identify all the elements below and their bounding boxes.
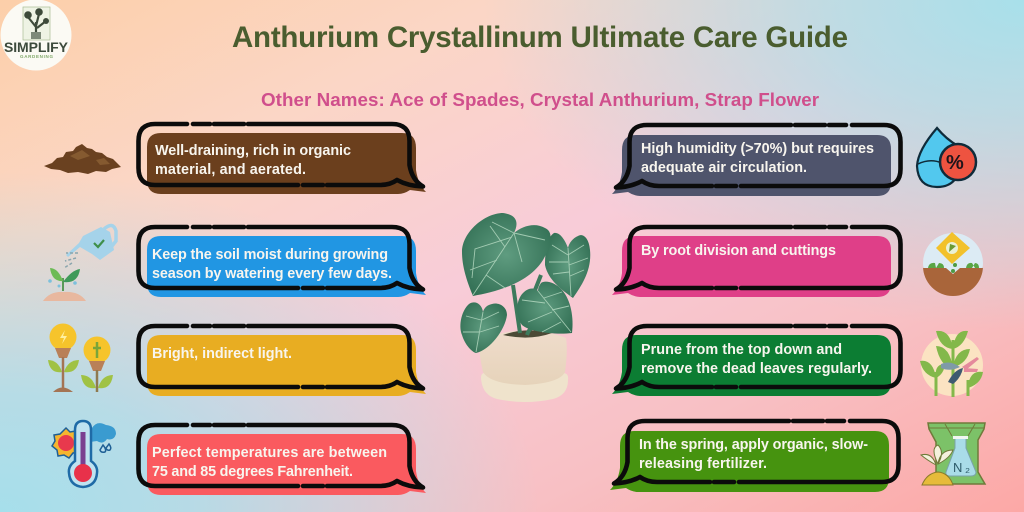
stems — [513, 275, 541, 335]
icon: humidity droplet with percent — [917, 128, 976, 187]
icon: watering can and seedling — [43, 225, 116, 301]
callout: humidity: High humidity (>70%) but requires — [641, 141, 874, 157]
callout: propagation: By root division and cuttings — [641, 243, 836, 259]
leaf: right — [545, 233, 590, 298]
icon: light bulbs with leaves — [48, 324, 113, 392]
callout: pruning — [612, 326, 900, 396]
callout: water — [138, 227, 426, 297]
logo: Simplify Gardening — [0, 0, 72, 70]
callout: light — [138, 326, 426, 396]
pot body — [479, 331, 567, 385]
callout: temperature: 75 and 85 degrees Fahrenheit. — [152, 464, 353, 480]
icon: thermometer, sun and cloud — [52, 421, 116, 487]
callout: water: season by watering every few days. — [152, 266, 392, 282]
leaf: lower middle — [517, 282, 573, 334]
leaf: lower left — [460, 302, 507, 353]
callout: pruning: Prune from the top down and — [641, 342, 842, 358]
leaf: large — [462, 213, 551, 296]
icon: seed packet over soil — [923, 232, 983, 296]
title: Anthurium Crystallinum Ultimate Care Guide — [232, 21, 848, 54]
icon: soil pile — [44, 144, 121, 174]
callout: humidity: adequate air circulation. — [641, 160, 807, 176]
icon: humidity droplet with percent: % — [946, 152, 964, 174]
callout: pruning: remove the dead leaves regularly. — [641, 361, 872, 377]
callout: humidity — [612, 125, 900, 196]
callout: temperature: Perfect temperatures are between — [152, 445, 387, 461]
icon: fertilizer bag with flask: N₂ — [953, 460, 970, 475]
callout: fertilizer — [610, 421, 898, 492]
callout: fertilizer: releasing fertilizer. — [639, 456, 767, 472]
callout: fertilizer: In the spring, apply organic, slow- — [639, 437, 868, 453]
callout: temperature — [138, 425, 426, 495]
icon: fertilizer bag with flask — [921, 423, 985, 485]
callout: water: Keep the soil moist during growing — [152, 247, 388, 263]
logo: Simplify Gardening: SIMPLIFY — [4, 39, 69, 55]
pot soil — [503, 330, 552, 338]
callout: soil: Well-draining, rich in organic — [155, 143, 351, 159]
icon: pruning plant and scissors — [920, 331, 983, 397]
callout: light: Bright, indirect light. — [152, 346, 292, 362]
callout: soil — [138, 124, 426, 194]
callout: propagation — [612, 227, 900, 297]
subtitle: other names: Other Names: Ace of Spades, Crystal Anthurium, Strap Flower — [261, 89, 820, 110]
central plant in pot — [460, 213, 590, 402]
logo: Simplify Gardening: GARDENING — [20, 54, 53, 59]
callout: soil: material, and aerated. — [155, 162, 306, 178]
pot saucer — [481, 373, 568, 402]
